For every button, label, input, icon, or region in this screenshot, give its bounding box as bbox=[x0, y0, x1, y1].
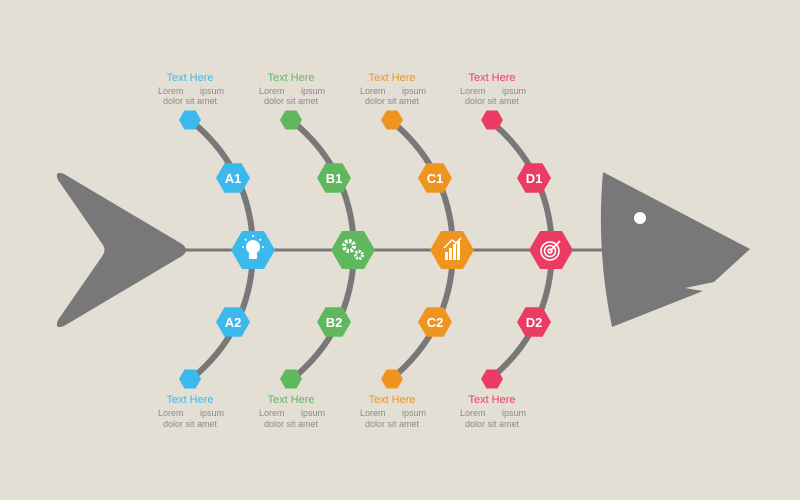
branch A: Text Here bbox=[166, 72, 214, 84]
spine bbox=[185, 248, 605, 252]
branch D bbox=[468, 72, 573, 406]
lorem text blocks: Lorem bbox=[460, 408, 486, 418]
branch A: Text Here bbox=[166, 394, 214, 406]
branch B: Text Here bbox=[267, 394, 315, 406]
lorem text blocks: ipsum bbox=[301, 86, 325, 96]
lorem text blocks: dolor sit amet bbox=[465, 419, 520, 429]
branch D: Text Here bbox=[468, 394, 516, 406]
lorem text blocks: ipsum bbox=[200, 86, 224, 96]
branch A bbox=[166, 72, 275, 406]
lorem text blocks: dolor sit amet bbox=[465, 96, 520, 106]
lorem text blocks: ipsum bbox=[502, 408, 526, 418]
lorem text blocks: dolor sit amet bbox=[264, 96, 319, 106]
lorem text blocks: Lorem bbox=[259, 86, 285, 96]
lorem text blocks: dolor sit amet bbox=[365, 419, 420, 429]
icon: gears bbox=[344, 241, 362, 258]
icon: target bbox=[541, 241, 560, 260]
lorem text blocks: ipsum bbox=[402, 408, 426, 418]
lorem text blocks: Lorem bbox=[158, 408, 184, 418]
lorem text blocks: dolor sit amet bbox=[264, 419, 319, 429]
branch C bbox=[368, 72, 474, 406]
branch B: B2 bbox=[326, 315, 342, 330]
lorem text blocks: Lorem bbox=[360, 408, 386, 418]
lorem text blocks: ipsum bbox=[200, 408, 224, 418]
branch C: C2 bbox=[427, 315, 443, 330]
branch B: Text Here bbox=[267, 72, 315, 84]
lorem text blocks: ipsum bbox=[402, 86, 426, 96]
icon: bulb bbox=[242, 235, 264, 259]
branch C: Text Here bbox=[368, 394, 416, 406]
tail bbox=[57, 173, 186, 327]
lorem text blocks: Lorem bbox=[259, 408, 285, 418]
branch D: D1 bbox=[526, 171, 542, 186]
lorem text blocks: Lorem bbox=[360, 86, 386, 96]
lorem text blocks: Lorem bbox=[158, 86, 184, 96]
lorem text blocks: dolor sit amet bbox=[163, 419, 218, 429]
lorem text blocks bbox=[158, 86, 526, 429]
branch B bbox=[267, 72, 375, 406]
branch A: A2 bbox=[225, 315, 241, 330]
branch A: A1 bbox=[225, 171, 241, 186]
lorem text blocks: ipsum bbox=[502, 86, 526, 96]
head bbox=[601, 172, 750, 327]
icon: chart bbox=[444, 238, 461, 260]
branch C: Text Here bbox=[368, 72, 416, 84]
branch C: C1 bbox=[427, 171, 443, 186]
branch D: Text Here bbox=[468, 72, 516, 84]
lorem text blocks: dolor sit amet bbox=[365, 96, 420, 106]
eye bbox=[634, 212, 646, 224]
lorem text blocks: dolor sit amet bbox=[163, 96, 218, 106]
branch B: B1 bbox=[326, 171, 342, 186]
branch D: D2 bbox=[526, 315, 542, 330]
lorem text blocks: Lorem bbox=[460, 86, 486, 96]
lorem text blocks: ipsum bbox=[301, 408, 325, 418]
